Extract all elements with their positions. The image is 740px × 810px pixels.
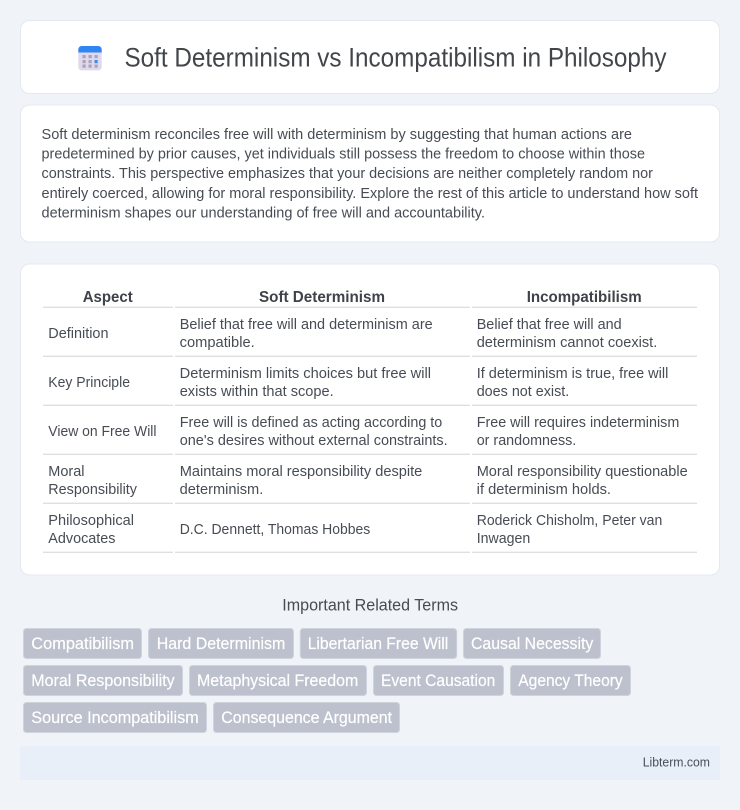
table row: philosophical advocates: Inwagen (477, 531, 530, 547)
title: Soft Determinism vs Incompatibilism in Philosophy (124, 43, 667, 73)
table row: key principle: does not exist. (477, 384, 569, 400)
table row: definition: Belief that free will and (477, 317, 622, 333)
table row: view on free will: Free will is defined as acting according to (180, 415, 442, 431)
table row: philosophical advocates: D.C. Dennett, Thomas Hobbes (180, 522, 370, 538)
panel: introduction (20, 105, 720, 242)
table row: key principle (43, 366, 697, 405)
panel: comparison table (20, 264, 720, 575)
tag: Moral Responsibility (24, 666, 182, 696)
table row: key principle: Key Principle (48, 375, 130, 391)
tag: Event Causation (374, 666, 504, 696)
tag: Agency Theory (510, 666, 630, 696)
tag: Metaphysical Freedom (190, 666, 366, 696)
tag: Compatibilism: Compatibilism (31, 635, 134, 653)
table row: view on free will: Free will requires indeterminism (477, 415, 679, 431)
table row: philosophical advocates: Philosophical (48, 513, 134, 529)
tag: Compatibilism (24, 628, 142, 658)
panel: header (20, 20, 720, 94)
tag: Metaphysical Freedom: Metaphysical Freedom (197, 672, 358, 690)
text block: introduction paragraph: constraints. This perspective emphasizes that your decisions are neither completely random nor (42, 166, 653, 182)
tag: Libertarian Free Will (300, 628, 457, 658)
text block: introduction paragraph: predetermined by prior causes, yet individuals still possess the freedom to choose within those (42, 147, 645, 163)
table header row: Aspect (83, 289, 133, 306)
tag: Source Incompatibilism: Source Incompatibilism (31, 709, 199, 727)
table row: definition: Belief that free will and determinism are (180, 317, 433, 333)
text block: introduction paragraph: Soft determinism reconciles free will with determinism by suggesting that human actions are (42, 127, 632, 143)
table row: key principle: Determinism limits choices but free will (180, 366, 431, 382)
table header row: Incompatibilism (527, 289, 642, 306)
table row: definition (43, 317, 697, 356)
tag: Causal Necessity: Causal Necessity (471, 635, 594, 653)
table row: definition: determinism cannot coexist. (477, 335, 657, 351)
text block: introduction paragraph (42, 127, 698, 221)
table row: view on free will: View on Free Will (48, 424, 156, 440)
table row: philosophical advocates: Advocates (48, 531, 115, 547)
icon: calendar (78, 46, 102, 70)
tag: Moral Responsibility: Moral Responsibility (31, 672, 175, 690)
table row: moral responsibility: if determinism holds. (477, 482, 611, 498)
tag: Event Causation: Event Causation (381, 672, 495, 690)
table row: moral responsibility: Responsibility (48, 482, 138, 498)
table row: view on free will (43, 415, 697, 454)
tag: Libertarian Free Will: Libertarian Free Will (308, 635, 448, 653)
table row: view on free will: or randomness. (477, 433, 576, 449)
text block: introduction paragraph: entirely coerced, allowing for moral responsibility. Explore the rest of this article to understand how soft (42, 186, 698, 202)
table header row: Soft Determinism (259, 289, 385, 306)
table row: moral responsibility: Maintains moral responsibility despite (180, 464, 422, 480)
tag: Source Incompatibilism (24, 702, 206, 732)
tag: Consequence Argument (214, 702, 400, 732)
table row: moral responsibility: Moral responsibility questionable (477, 464, 688, 480)
table row: key principle: If determinism is true, free will (477, 366, 668, 382)
tag: Consequence Argument: Consequence Argument (221, 709, 392, 727)
table row: key principle: exists within that scope. (180, 384, 334, 400)
table row: moral responsibility: determinism. (180, 482, 263, 498)
tag: Causal Necessity (464, 628, 600, 658)
heading: important related terms: Important Related Terms (282, 597, 458, 615)
table row: definition: Definition (48, 326, 108, 342)
table row: philosophical advocates: Roderick Chisholm, Peter van (477, 513, 662, 529)
tag: Agency Theory: Agency Theory (518, 672, 623, 690)
footer: Libterm.com (643, 755, 710, 770)
tag: Hard Determinism (148, 628, 294, 658)
table row: philosophical advocates (43, 513, 697, 552)
related term tags (24, 628, 630, 732)
text block: introduction paragraph: determinism shapes our understanding of free will and accountability. (42, 205, 485, 221)
tag: Hard Determinism: Hard Determinism (157, 635, 285, 653)
table row: moral responsibility (43, 464, 697, 503)
table header row (43, 289, 697, 307)
table row: definition: compatible. (180, 335, 255, 351)
table row: moral responsibility: Moral (48, 464, 84, 480)
table row: view on free will: one's desires without external constraints. (180, 433, 448, 449)
footer (20, 746, 720, 780)
